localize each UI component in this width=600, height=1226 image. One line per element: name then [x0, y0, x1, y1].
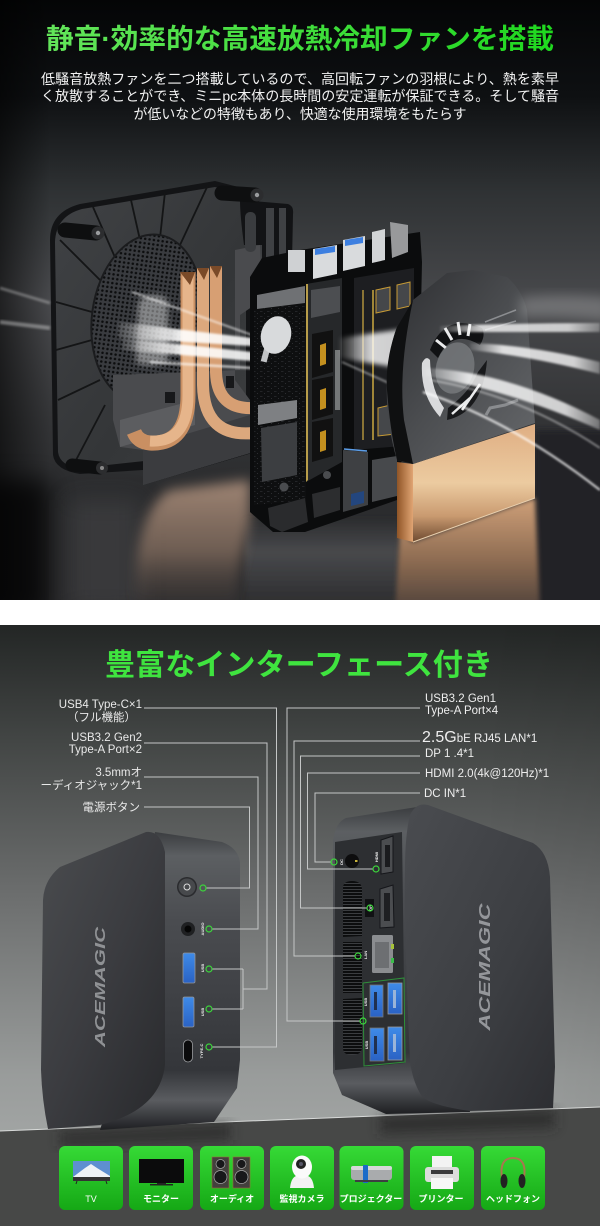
tile: projector: プロジェクター	[340, 1193, 402, 1204]
dp port	[365, 885, 394, 928]
floor under board	[244, 526, 399, 592]
heat pipes	[134, 266, 254, 443]
tile: audio: オーディオ	[210, 1193, 254, 1204]
usb block	[363, 978, 405, 1066]
panel: cooling fan	[0, 0, 600, 620]
usb block: USB	[363, 998, 368, 1006]
lan port	[363, 935, 394, 973]
hdmi port	[374, 836, 393, 874]
tile: monitor: モニター	[143, 1193, 179, 1204]
audio jack: AUDIO	[200, 923, 205, 935]
vents	[343, 881, 362, 1055]
title: interfaces: 豊富なインターフェース付き	[105, 649, 493, 682]
audio jack	[181, 922, 205, 936]
rear panel	[335, 832, 405, 1070]
plate ribs	[56, 185, 208, 462]
back plate	[50, 181, 293, 485]
logo: ACEMAGIC	[477, 903, 494, 1032]
airflow between board and fan	[339, 326, 397, 384]
floor grey sheen	[73, 503, 137, 600]
tile: audio	[200, 1146, 264, 1210]
ram stick	[306, 278, 342, 482]
left port labels: 3.5mmオ	[95, 766, 142, 779]
tile: TV: TV	[85, 1194, 97, 1204]
table surface	[0, 1107, 600, 1226]
right port labels	[422, 693, 549, 800]
tile: camera: 監視カメラ	[279, 1193, 325, 1204]
leader lines	[144, 708, 420, 1047]
bracket block	[143, 415, 250, 485]
right port labels: 2.5GbE RJ45 LAN*1	[422, 729, 537, 746]
left port labels	[40, 699, 142, 814]
circuit board	[250, 222, 422, 532]
right mini pc	[333, 804, 555, 1114]
airflow through plate	[0, 288, 252, 368]
green port markers	[200, 859, 379, 1050]
title: cooling: 静音·効率的な高速放熱冷却ファンを搭載	[46, 23, 554, 54]
tile: printer: プリンター	[418, 1193, 464, 1204]
right ssd modules	[354, 268, 414, 450]
tile: monitor	[129, 1146, 193, 1210]
description text: が低いなどの特徴もあり、快適な使用環境をもたらす	[134, 106, 466, 122]
usb ports: USB	[200, 964, 205, 972]
description text: 低騒音放熱ファンを二つ搭載しているので、高回転ファンの羽根により、熱を素早	[41, 71, 559, 87]
bottom ports	[268, 449, 397, 532]
tile: projector	[340, 1146, 404, 1210]
usb ports: USB	[200, 1008, 205, 1016]
airflow exiting fan	[423, 296, 600, 490]
right port labels: Type-A Port×4	[425, 705, 499, 717]
panel: interfaces	[0, 625, 600, 1226]
left port labels: USB3.2 Gen2	[71, 732, 142, 744]
shield	[257, 286, 305, 309]
usb block: USB	[364, 1041, 369, 1049]
right port labels: DP 1 .4*1	[425, 748, 474, 760]
left mini pc cover	[41, 832, 165, 1129]
type-c port: TYPE-C	[199, 1044, 204, 1058]
dc jack: DC	[339, 859, 344, 865]
copper fin block	[397, 424, 535, 542]
lan port: LAN	[363, 951, 368, 959]
screw posts	[65, 188, 264, 474]
metal frame	[240, 200, 293, 262]
right port labels: HDMI 2.0(4k@120Hz)*1	[425, 768, 549, 780]
logo: ACEMAGIC	[92, 925, 109, 1048]
lower left ssd	[258, 400, 297, 482]
left mini pc	[41, 832, 240, 1130]
floor copper reflection left	[135, 480, 250, 610]
left port labels: 電源ボタン	[82, 800, 140, 814]
left port labels: ーディオジャック*1	[40, 778, 142, 792]
mesh disc	[90, 234, 197, 391]
blower fan	[387, 270, 535, 464]
left port labels: （フル機能）	[67, 710, 136, 724]
description text: く放散することができ、ミニpc本体の長時間の安定運転が保証できる。そして騒音	[41, 88, 559, 104]
tile: headphones: ヘッドフォン	[486, 1194, 540, 1204]
right mini pc cover	[405, 804, 555, 1111]
coin battery	[260, 316, 292, 362]
left mini pc body	[100, 832, 240, 1130]
tile: camera	[270, 1146, 334, 1210]
fan openings and blades	[422, 322, 487, 420]
tile: headphones	[481, 1146, 545, 1210]
inner bracket	[113, 245, 262, 485]
type-c port	[184, 1040, 204, 1062]
left port labels: Type-A Port×2	[69, 744, 142, 756]
tile: TV	[59, 1146, 123, 1210]
hdmi port: HDMI	[374, 852, 379, 862]
device tiles	[59, 1146, 545, 1210]
power button	[177, 877, 197, 897]
right port labels: DC IN*1	[424, 788, 466, 800]
tile: printer	[410, 1146, 474, 1210]
usb ports	[183, 953, 205, 1027]
dp port: DP	[368, 905, 373, 911]
right port labels: USB3.2 Gen1	[425, 693, 496, 705]
left port labels: USB4 Type-C×1	[59, 699, 142, 711]
dc jack	[339, 854, 359, 868]
floor copper reflection right	[395, 430, 600, 610]
description text	[41, 71, 559, 122]
right mini pc body	[333, 807, 470, 1114]
top ports	[288, 222, 408, 279]
